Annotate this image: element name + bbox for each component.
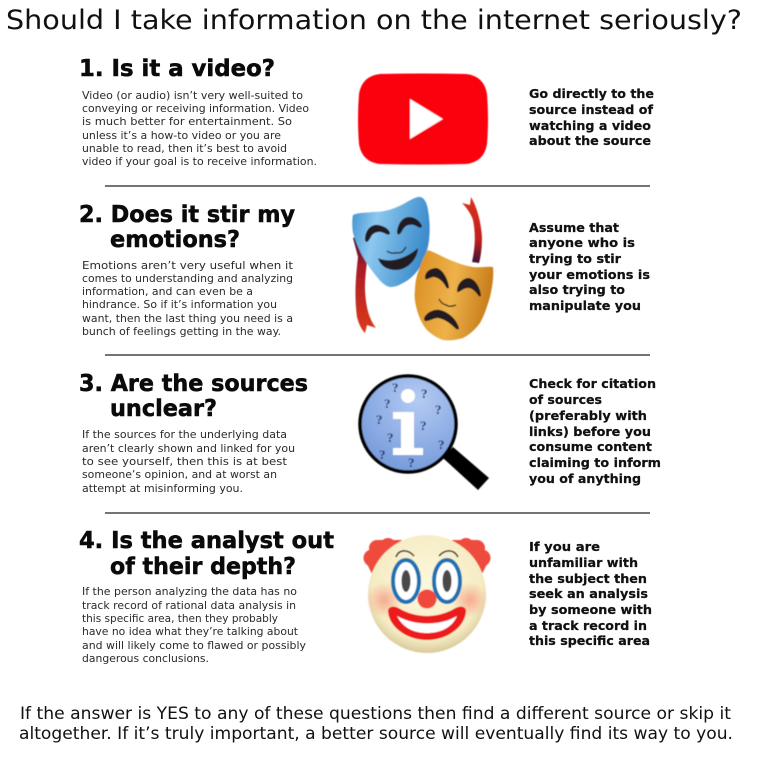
text block: emotions explanation: information, and can even be a (82, 285, 253, 298)
text block: analyst explanation: and will likely come to flawed or possibly (82, 639, 306, 652)
callout: go directly to the source (529, 86, 654, 148)
callout: check for citation: you of anything (529, 471, 641, 486)
callout: check for citation (529, 376, 661, 486)
text block: sources explanation: attempt at misinforming you. (82, 482, 243, 495)
callout: seek an analysis: seek an analysis (529, 586, 648, 601)
heading: analyst out of depth: 4. Is the analyst out (79, 528, 334, 554)
callout: go directly to the source: source instead of (529, 102, 654, 117)
callout: seek an analysis: a track record in (529, 618, 647, 633)
icon: clown face (364, 535, 490, 653)
text block: sources explanation (82, 428, 295, 495)
footer conclusion (19, 704, 733, 743)
heading: are the sources unclear: 3. Are the sources (79, 371, 308, 397)
icon: magnifying glass: ? (408, 455, 414, 470)
callout: go directly to the source: Go directly to the (529, 86, 654, 101)
text block: emotions explanation: bunch of feelings getting in the way. (82, 325, 281, 338)
footer conclusion: altogether. If it’s truly important, a better source will eventually find its way to you. (19, 724, 733, 743)
icon: magnifying glass (360, 376, 489, 490)
text block: sources explanation: to see yourself, then this is at best (82, 455, 288, 468)
icon: magnifying glass: ? (379, 447, 386, 462)
text block: analyst explanation: have no idea what they’re talking about (82, 625, 299, 638)
panel: 3 are the sources unclear (79, 371, 661, 495)
callout: seek an analysis (529, 539, 652, 648)
heading: does it stir my emotions: 2. Does it stir my (79, 202, 295, 228)
text block: analyst explanation: track record of rational data analysis in (82, 599, 296, 612)
icon: magnifying glass: ? (392, 380, 398, 395)
text block: sources explanation: If the sources for the underlying data (82, 428, 287, 441)
heading: is it a video: 1. Is it a video? (79, 56, 275, 82)
text block: video explanation: unless it’s a how-to video or you are (82, 129, 281, 142)
callout: seek an analysis: the subject then (529, 571, 647, 586)
callout: check for citation: (preferably with (529, 408, 647, 423)
text block: video explanation: conveying or receiving information. Video (82, 102, 309, 115)
callout: assume manipulation: Assume that (529, 220, 619, 235)
icon: theatre masks (352, 197, 493, 340)
panel: 4 is the analyst out of their depth (79, 528, 652, 665)
callout: check for citation: of sources (529, 392, 602, 407)
heading: does it stir my emotions (79, 202, 295, 253)
callout: seek an analysis: this specific area (529, 633, 650, 648)
heading: does it stir my emotions: emotions? (110, 227, 240, 253)
text block: sources explanation: aren’t clearly shown and linked for you (82, 442, 295, 455)
callout: go directly to the source: about the source (529, 133, 651, 148)
title: Should I take information on the internet seriously? (6, 5, 742, 36)
text block: video explanation: Video (or audio) isn’t very well-suited to (82, 89, 303, 102)
text block: emotions explanation: Emotions aren’t very useful when it (82, 259, 294, 272)
callout: check for citation: claiming to inform (529, 455, 661, 470)
text block: video explanation (82, 89, 317, 168)
footer conclusion: If the answer is YES to any of these questions then find a different source or skip it (20, 704, 732, 723)
heading: are the sources unclear (79, 371, 308, 422)
callout: go directly to the source: watching a video (529, 118, 651, 133)
text block: analyst explanation: this specific area, then they probably (82, 612, 278, 625)
callout: assume manipulation: also trying to (529, 282, 625, 297)
callout: check for citation: Check for citation (529, 376, 656, 391)
callout: seek an analysis: If you are (529, 539, 600, 554)
callout: assume manipulation: anyone who is (529, 235, 635, 250)
heading: are the sources unclear: unclear? (110, 396, 217, 422)
text block: video explanation: video if your goal is to receive information. (82, 155, 317, 168)
text block: analyst explanation: dangerous conclusions. (82, 652, 209, 665)
panel: 2 does it stir my emotions (79, 197, 650, 340)
text block: video explanation: unable to read, then it’s best to avoid (82, 142, 287, 155)
text block: emotions explanation: comes to understanding and analyzing (82, 272, 293, 285)
callout: assume manipulation: trying to stir (529, 251, 622, 266)
text block: emotions explanation: hindrance. So if it’s information you (82, 298, 277, 311)
text block: analyst explanation: If the person analyzing the data has no (82, 585, 297, 598)
icon: magnifying glass: ? (421, 386, 428, 401)
text block: sources explanation: someone’s opinion, and at worst an (82, 468, 277, 481)
callout: assume manipulation: manipulate you (529, 298, 641, 313)
icon: magnifying glass: ? (420, 418, 426, 433)
icon: magnifying glass: ? (376, 412, 382, 427)
callout: seek an analysis: unfamiliar with (529, 555, 638, 570)
icon: video play button (358, 74, 488, 164)
callout: check for citation: links) before you (529, 424, 651, 439)
icon: magnifying glass: ? (438, 437, 444, 452)
icon: magnifying glass: ? (435, 402, 442, 417)
panel: 1 is it a video (79, 56, 654, 168)
callout: assume manipulation (529, 220, 650, 313)
text block: analyst explanation (82, 585, 306, 665)
text block: emotions explanation: want, then the last thing you need is a (82, 312, 293, 325)
heading: analyst out of depth (79, 528, 334, 580)
callout: check for citation: consume content (529, 439, 652, 454)
icon: magnifying glass: ? (387, 430, 394, 445)
callout: assume manipulation: your emotions is (529, 267, 650, 282)
heading: analyst out of depth: of their depth? (110, 554, 296, 580)
icon: magnifying glass: ? (384, 396, 390, 411)
callout: seek an analysis: by someone with (529, 602, 652, 617)
text block: video explanation: is much better for entertainment. So (82, 115, 292, 128)
text block: emotions explanation (82, 259, 294, 338)
